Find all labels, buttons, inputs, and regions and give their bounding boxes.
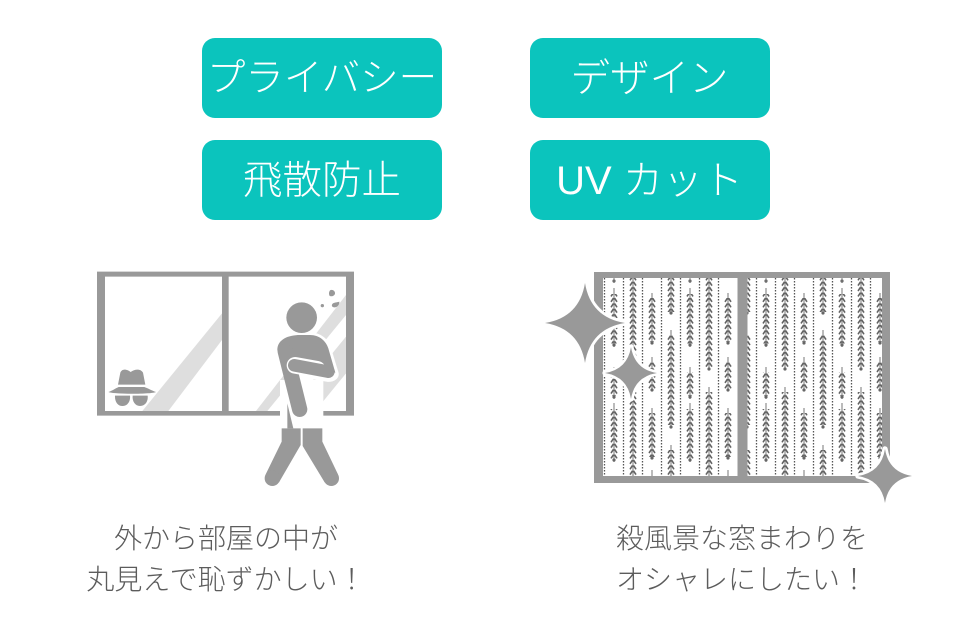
button: UV cut: UV カット <box>556 159 743 203</box>
button: privacy: プライバシー <box>207 57 437 100</box>
button: shatter prevention: 飛散防止 <box>243 159 401 203</box>
window frame <box>594 272 890 483</box>
caption: left <box>86 523 366 595</box>
icon: sweat drops <box>321 290 339 307</box>
icon: small sparkle <box>605 347 657 399</box>
caption: left: 丸見えで恥ずかしい！ <box>86 564 366 595</box>
caption: right: オシャレにしたい！ <box>616 564 868 595</box>
icon: large sparkle <box>545 283 625 363</box>
window frame <box>97 272 354 416</box>
window glare bands <box>142 295 346 413</box>
button: design: デザイン <box>570 57 728 101</box>
caption: right <box>616 523 868 595</box>
caption: left: 外から部屋の中が <box>114 523 338 554</box>
person halo <box>277 302 336 429</box>
right illustration: patterned curtains with sparkles <box>545 272 912 503</box>
left leg <box>265 428 301 486</box>
right leg <box>303 428 339 486</box>
icon: corner sparkle <box>858 449 912 503</box>
caption: right: 殺風景な窓まわりを <box>616 523 868 554</box>
left illustration: person exposed at window <box>97 272 354 486</box>
person <box>265 302 339 486</box>
button: design <box>530 38 770 118</box>
button: shatter prevention <box>202 140 442 220</box>
curtain pattern <box>604 278 884 476</box>
icon: hat and sunglasses peeper <box>108 370 156 406</box>
illustrations canvas <box>97 272 912 503</box>
button: UV cut <box>530 140 770 220</box>
button: privacy <box>202 38 442 118</box>
